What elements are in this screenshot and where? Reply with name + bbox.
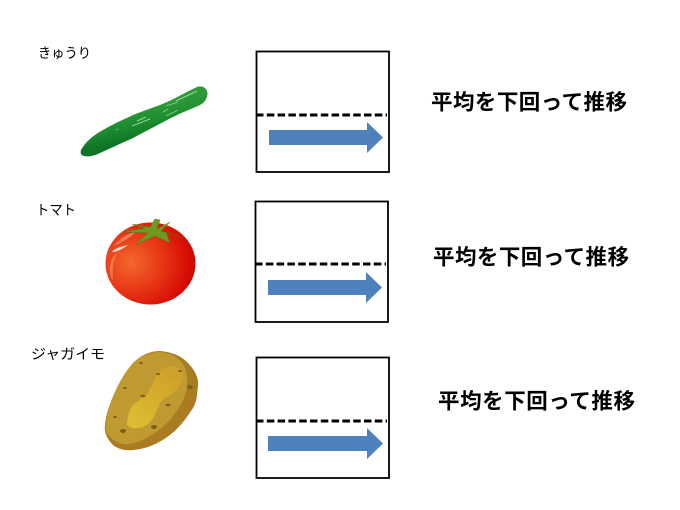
arrow: tomato trend — [268, 272, 382, 303]
arrow: cucumber trend — [269, 122, 383, 153]
row: potato — [31, 346, 635, 478]
chart box: cucumber — [256, 52, 389, 172]
label: tomato: トマト — [36, 202, 76, 218]
chart box: potato — [256, 358, 389, 478]
icon: tomato — [106, 219, 196, 304]
icon: potato — [105, 351, 198, 450]
chart box: tomato — [255, 202, 388, 322]
trend text: tomato: 平均を下回って推移 — [433, 246, 629, 270]
label: cucumber: きゅうり — [38, 45, 91, 61]
label: potato: ジャガイモ — [31, 346, 105, 362]
arrow: potato trend — [268, 428, 383, 459]
row: tomato — [36, 202, 629, 322]
trend text: potato: 平均を下回って推移 — [438, 390, 635, 414]
icon: cucumber — [81, 86, 208, 156]
row: cucumber — [38, 45, 627, 172]
trend text: cucumber: 平均を下回って推移 — [431, 90, 627, 114]
